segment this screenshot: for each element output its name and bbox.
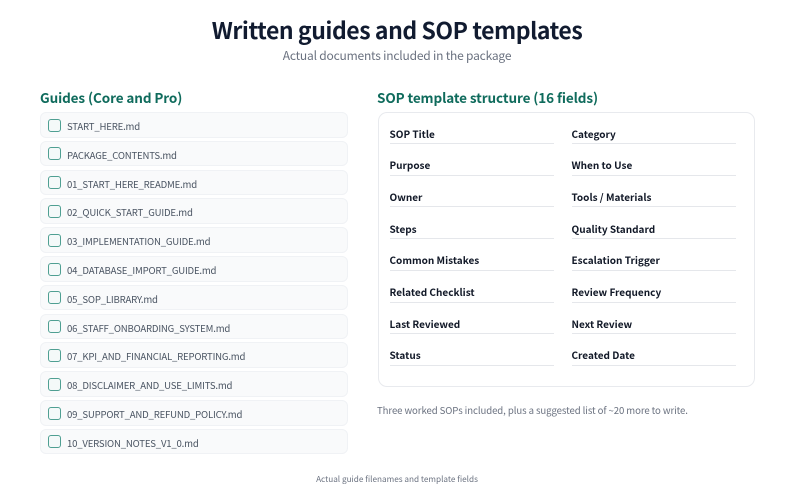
panel: guides list xyxy=(40,112,348,454)
heading: SOP template: SOP template structure (16 fields) xyxy=(377,87,598,107)
field: Status xyxy=(390,346,554,366)
field: Owner: Owner xyxy=(390,189,422,204)
guide row: 04_DATABASE_IMPORT_GUIDE.md xyxy=(40,256,348,282)
guide row: 01_START_HERE_README.md xyxy=(40,170,348,195)
heading: guides: Guides (Core and Pro) xyxy=(40,87,182,107)
title: Written guides and SOP templates xyxy=(212,12,582,46)
field: Review Frequency xyxy=(572,282,736,302)
field: Next Review: Next Review xyxy=(572,316,632,331)
field: Quality Standard: Quality Standard xyxy=(572,221,655,236)
guide row: 05_SOP_LIBRARY.md: 05_SOP_LIBRARY.md xyxy=(67,292,158,306)
note: worked SOPs: Three worked SOPs included, plus a suggested list of ~20 more to write. xyxy=(377,403,688,417)
guide row: 06_STAFF_ONBOARDING_SYSTEM.md xyxy=(40,314,348,339)
guide row: 03_IMPLEMENTATION_GUIDE.md: 03_IMPLEMENTATION_GUIDE.md xyxy=(67,234,210,248)
field: Created Date xyxy=(572,346,736,366)
footer caption: Actual guide filenames and template fields xyxy=(316,473,478,485)
field: Review Frequency: Review Frequency xyxy=(572,284,661,299)
guide row: 07_KPI_AND_FINANCIAL_REPORTING.md: 07_KPI_AND_FINANCIAL_REPORTING.md xyxy=(67,349,245,363)
guide row: 08_DISCLAIMER_AND_USE_LIMITS.md xyxy=(40,371,348,397)
field: Related Checklist: Related Checklist xyxy=(390,284,475,299)
panel: SOP template fields xyxy=(378,112,754,387)
field: Status: Status xyxy=(390,347,421,362)
subtitle: Actual documents included in the package xyxy=(283,47,511,64)
guide row: PACKAGE_CONTENTS.md: PACKAGE_CONTENTS.md xyxy=(67,148,177,162)
field: Quality Standard xyxy=(572,219,736,239)
guide row: 01_START_HERE_README.md: 01_START_HERE_README.md xyxy=(67,177,197,191)
field: Category xyxy=(572,124,736,144)
field: Owner xyxy=(390,187,554,207)
guide row: PACKAGE_CONTENTS.md xyxy=(40,141,348,166)
guide row: 03_IMPLEMENTATION_GUIDE.md xyxy=(40,227,348,253)
field: SOP Title: SOP Title xyxy=(390,126,435,140)
guide row: 09_SUPPORT_AND_REFUND_POLICY.md xyxy=(40,400,348,426)
guide row: 05_SOP_LIBRARY.md xyxy=(40,285,348,310)
field: Next Review xyxy=(572,314,736,334)
field: When to Use: When to Use xyxy=(572,157,632,172)
field: When to Use xyxy=(572,156,736,176)
guide row: START_HERE.md xyxy=(40,112,348,138)
guide row: 02_QUICK_START_GUIDE.md xyxy=(40,198,348,224)
field: SOP Title xyxy=(390,124,554,144)
field: Purpose xyxy=(390,156,554,176)
field: Created Date: Created Date xyxy=(572,347,635,362)
field: Steps: Steps xyxy=(390,221,417,236)
guide row: 10_VERSION_NOTES_V1_0.md: 10_VERSION_NOTES_V1_0.md xyxy=(67,436,199,450)
field: Related Checklist xyxy=(390,282,554,302)
guide row: 07_KPI_AND_FINANCIAL_REPORTING.md xyxy=(40,342,348,368)
guide row: 02_QUICK_START_GUIDE.md: 02_QUICK_START_GUIDE.md xyxy=(67,205,193,219)
field: Purpose: Purpose xyxy=(390,157,430,172)
field: Last Reviewed xyxy=(390,314,554,334)
field: Common Mistakes: Common Mistakes xyxy=(390,252,479,267)
field: Escalation Trigger xyxy=(572,251,736,271)
guide row: 09_SUPPORT_AND_REFUND_POLICY.md: 09_SUPPORT_AND_REFUND_POLICY.md xyxy=(67,407,242,421)
field: Escalation Trigger: Escalation Trigger xyxy=(572,252,660,267)
field: Last Reviewed: Last Reviewed xyxy=(390,316,460,331)
guide row: 08_DISCLAIMER_AND_USE_LIMITS.md: 08_DISCLAIMER_AND_USE_LIMITS.md xyxy=(67,378,232,392)
field: Common Mistakes xyxy=(390,251,554,271)
guide row: 06_STAFF_ONBOARDING_SYSTEM.md: 06_STAFF_ONBOARDING_SYSTEM.md xyxy=(67,321,230,335)
field: Category: Category xyxy=(572,126,616,140)
field: Tools / Materials xyxy=(572,187,736,207)
guide row: 10_VERSION_NOTES_V1_0.md xyxy=(40,429,348,454)
field: Steps xyxy=(390,219,554,239)
guide row: START_HERE.md: START_HERE.md xyxy=(67,119,140,133)
field: Tools / Materials: Tools / Materials xyxy=(572,189,651,204)
guide row: 04_DATABASE_IMPORT_GUIDE.md: 04_DATABASE_IMPORT_GUIDE.md xyxy=(67,263,216,277)
